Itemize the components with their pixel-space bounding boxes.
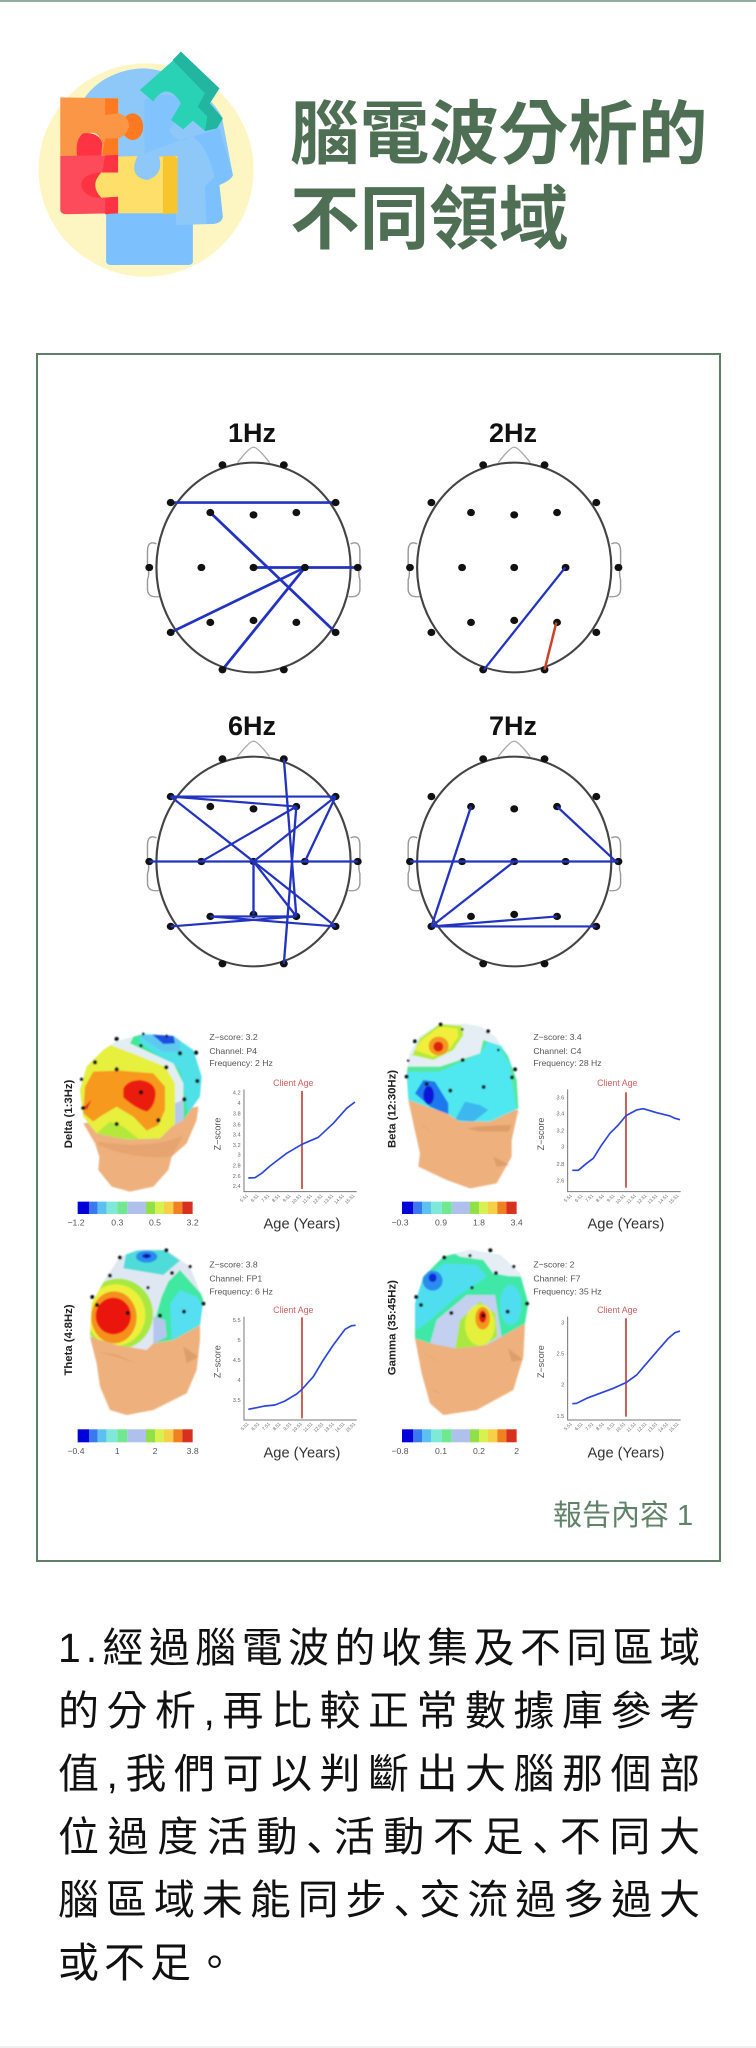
chart: z-score by age [212,1078,357,1232]
color bar: −0.8 [391,1446,409,1456]
color bar: 0.3 [111,1218,124,1228]
readout [209,1032,273,1068]
chart: z-score by age: 3 [561,1320,564,1326]
panel: Delta topography and chart [63,1030,357,1232]
chart: z-score by age: 9.51 [282,1193,292,1203]
title: 不同領域 [290,180,568,258]
color bar: −1.2 [67,1218,85,1228]
chart: z-score by age: 1.5 [556,1414,564,1420]
chart: z-score by age: 14.51 [334,1421,346,1433]
chart: z-score by age: Age (Years) [264,1216,340,1232]
head: Delta brain map [73,1030,207,1192]
panel: 2Hz connectivity head [406,418,622,673]
chart: z-score by age: 5.51 [240,1421,250,1431]
chart: z-score by age: 2.4 [233,1184,241,1190]
chart: z-score by age: 7.51 [584,1193,595,1203]
chart: z-score by age: 14.51 [657,1421,669,1433]
chart: z-score by age: 12.51 [313,1421,325,1433]
color bar: 0.1 [435,1446,447,1456]
chart: z-score by age: 12.51 [312,1193,324,1205]
head: Theta brain map [83,1247,210,1415]
chart: z-score by age: 10.51 [615,1193,627,1205]
label: 2Hz: 2Hz [489,418,537,448]
chart: z-score by age [536,1078,681,1232]
chart: z-score by age: 3.2 [556,1128,564,1134]
chart: z-score by age: 9.51 [606,1421,616,1431]
chart: z-score by age: 4 [237,1378,241,1384]
text block: explanation: 位過度活動 活動不足 不同大 [58,1814,705,1860]
chart: z-score by age: 2.8 [233,1163,241,1169]
readout: Z−score: 3.2 [209,1032,258,1042]
chart: z-score by age: 13.51 [647,1193,659,1205]
chart: z-score by age: Client Age [597,1305,638,1315]
chart: z-score by age: Age (Years) [588,1216,664,1232]
readout: Channel: C4 [533,1046,582,1056]
label: Theta (4:8Hz): Theta (4:8Hz) [63,1304,75,1376]
chart: z-score by age: 8.51 [595,1421,605,1431]
chart: z-score by age: 6.51 [574,1421,584,1431]
chart: z-score by age: 2.6 [556,1178,564,1184]
readout: Z−score: 3.8 [209,1260,258,1270]
chart: z-score by age: 10.51 [291,1421,303,1433]
chart: z-score by age: 6.51 [250,1193,260,1203]
readout: Frequency: 35 Hz [533,1286,602,1296]
text block: explanation: 或不足。 [58,1929,240,1989]
chart: z-score by age: 13.51 [323,1193,335,1205]
chart: z-score by age: 4.2 [233,1091,241,1097]
chart: z-score by age: 5.51 [563,1193,573,1203]
chart: z-score by age: Z−score [212,1118,222,1150]
chart: z-score by age: 4 [237,1101,241,1107]
chart: z-score by age: 11.51 [301,1193,313,1205]
panel: 6Hz connectivity head [145,711,362,967]
chart: z-score by age: 15.51 [345,1421,357,1433]
chart: z-score by age: 3 [561,1145,564,1151]
panel: Beta topography and chart [387,1020,681,1232]
chart: z-score by age: 9.51 [606,1193,616,1203]
chart: z-score by age: 13.51 [323,1421,335,1433]
color bar: 3.2 [187,1218,199,1228]
label: 7Hz: 7Hz [489,711,537,741]
readout: Z−score: 3.4 [533,1032,582,1042]
color bar: 0.2 [473,1446,485,1456]
title: 腦電波分析的 [290,95,708,173]
chart: z-score by age: 12.51 [636,1193,648,1205]
chart: z-score by age: Age (Years) [588,1445,664,1461]
readout: Channel: P4 [209,1046,257,1056]
color bar [67,1202,199,1228]
color bar: 2 [153,1446,158,1456]
chart: z-score by age: Z−score [536,1345,546,1378]
chart: z-score by age: 12.51 [636,1421,648,1433]
chart: z-score by age: 4.5 [233,1358,241,1364]
chart: z-score by age: 8.51 [272,1421,282,1431]
panel: report frame [36,353,721,1562]
readout: Frequency: 2 Hz [209,1058,273,1068]
chart: z-score by age: 7.51 [261,1421,271,1431]
color bar: 2 [514,1446,519,1456]
color bar: 3.8 [187,1446,199,1456]
panel: 7Hz connectivity head [406,711,622,967]
chart: z-score by age: 15.51 [668,1421,680,1433]
chart: z-score by age: Client Age [273,1078,314,1088]
color bar: −0.4 [67,1446,85,1456]
color bar: 0.5 [149,1218,161,1228]
chart: z-score by age: 5.5 [233,1318,241,1324]
chart: z-score by age: Client Age [273,1305,314,1315]
chart: z-score by age: 3.8 [233,1112,241,1118]
color bar: 0.9 [435,1218,447,1228]
chart: z-score by age: 8.51 [595,1193,605,1203]
color bar [391,1202,523,1228]
chart: z-score by age: 5.51 [563,1421,573,1431]
chart: z-score by age: 10.51 [615,1421,627,1433]
chart: z-score by age: 3.2 [233,1143,241,1149]
color bar [391,1429,519,1456]
chart: z-score by age: 2.8 [556,1162,564,1168]
chart: z-score by age: 3 [237,1153,241,1159]
readout: Channel: FP1 [209,1274,262,1284]
text block: explanation: 、 [306,1803,347,1863]
chart: z-score by age: 2 [561,1383,564,1389]
chart: z-score by age: 7.51 [260,1193,271,1203]
readout: Frequency: 28 Hz [533,1058,602,1068]
label: Delta (1:3Hz): Delta (1:3Hz) [63,1079,75,1148]
color bar [67,1429,199,1456]
text block: explanation: 的分析,再比較正常數據庫參考 [58,1688,705,1734]
chart: z-score by age [536,1305,681,1461]
caption: report content 1: 報告內容 1 [553,1500,693,1532]
readout [533,1032,602,1068]
chart: z-score by age: 14.51 [333,1193,345,1205]
readout: Channel: F7 [533,1274,581,1284]
chart: z-score by age [212,1305,357,1461]
label: Gamma (35:45Hz): Gamma (35:45Hz) [387,1280,399,1375]
head: Gamma brain map [410,1247,533,1415]
label: 1Hz: 1Hz [228,418,276,448]
chart: z-score by age: 3.6 [233,1122,241,1128]
chart: z-score by age: 15.51 [344,1193,356,1205]
text block: explanation: 1.經過腦電波的收集及不同區域 [58,1625,705,1671]
chart: z-score by age: Z−score [536,1118,546,1150]
chart: z-score by age: 8.51 [271,1193,281,1203]
panel: Gamma topography and chart [387,1247,681,1461]
label: 6Hz: 6Hz [228,711,276,741]
head: Beta brain map [400,1020,527,1188]
bottom rule [0,2046,756,2048]
readout [209,1260,273,1296]
readout: Z−score: 2 [533,1260,575,1270]
chart: z-score by age: Client Age [597,1078,638,1088]
chart: z-score by age: 3.4 [556,1112,564,1118]
chart: z-score by age: 10.51 [291,1193,303,1205]
chart: z-score by age: 2.5 [556,1351,564,1357]
text block: explanation: 、 [393,1866,434,1926]
chart: z-score by age: 11.51 [625,1193,637,1205]
color bar: 1 [115,1446,120,1456]
chart: z-score by age: 13.51 [647,1421,659,1433]
chart: z-score by age: 5.51 [239,1193,249,1203]
chart: z-score by age: 14.51 [657,1193,669,1205]
chart: z-score by age: Age (Years) [264,1445,340,1461]
chart: z-score by age: Z−score [212,1345,222,1378]
chart: z-score by age: 6.51 [574,1193,584,1203]
chart: z-score by age: 3.5 [233,1398,241,1404]
chart: z-score by age: 7.51 [584,1421,595,1431]
icon: puzzle head [39,52,254,277]
color bar: 1.8 [473,1218,485,1228]
chart: z-score by age: 11.51 [625,1421,637,1433]
color bar: −0.3 [391,1218,409,1228]
color bar: 3.4 [511,1218,523,1228]
readout: Frequency: 6 Hz [209,1286,273,1296]
chart: z-score by age: 3.6 [556,1095,564,1101]
readout [533,1260,602,1296]
text block: explanation: 腦區域未能同步 交流過多過大 [58,1877,705,1923]
chart: z-score by age: 2.6 [233,1174,241,1180]
title [290,95,708,258]
label: Beta (12:30Hz): Beta (12:30Hz) [387,1070,399,1148]
chart: z-score by age: 11.51 [302,1421,314,1433]
chart: z-score by age: 9.51 [282,1421,293,1431]
panel: 1Hz connectivity head [145,418,362,673]
chart: z-score by age: 15.51 [668,1193,680,1205]
top rule [0,0,756,2]
text block: explanation [58,1625,705,1989]
text block: explanation: 、 [532,1803,573,1863]
chart: z-score by age: 6.51 [250,1421,261,1431]
chart: z-score by age: 5 [237,1338,241,1344]
chart: z-score by age: 3.4 [233,1132,241,1138]
panel: Theta topography and chart [63,1247,357,1461]
text block: explanation: 值,我們可以判斷出大腦那個部 [58,1751,705,1797]
